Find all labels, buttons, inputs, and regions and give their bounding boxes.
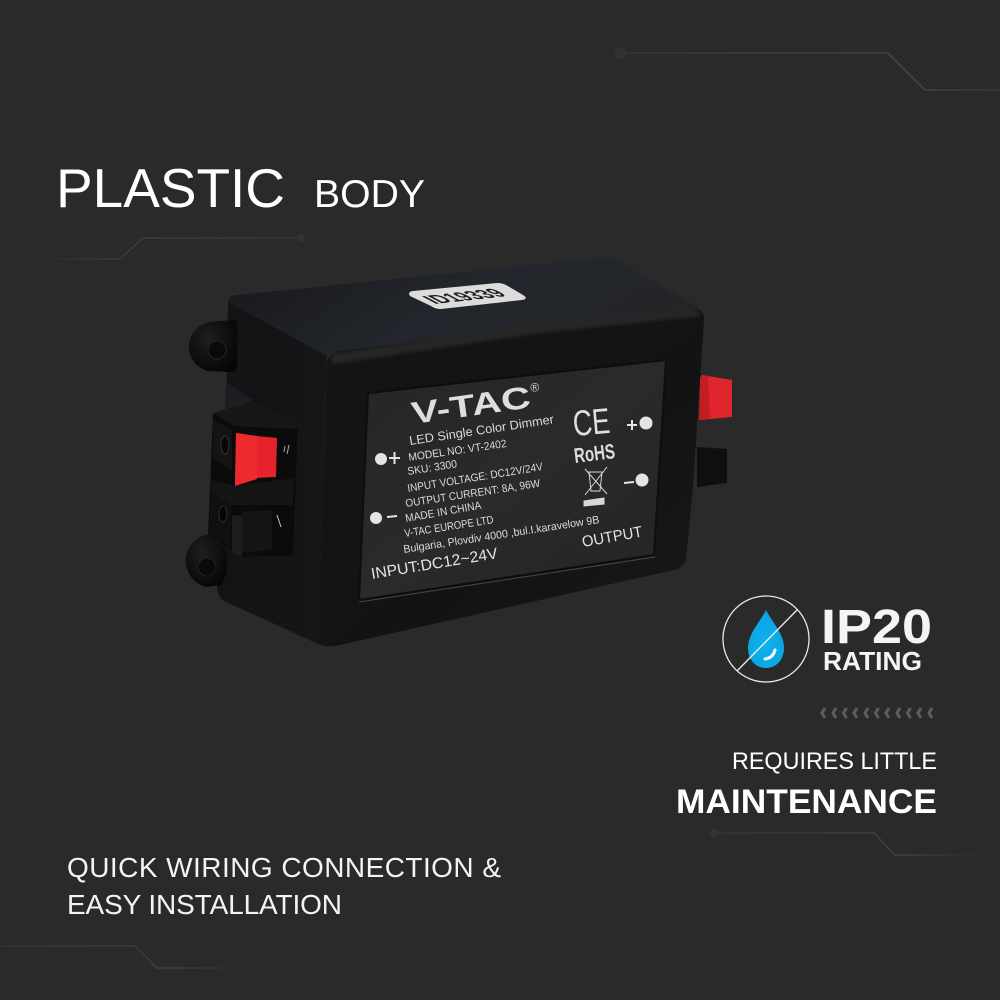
upper side panel: [213, 420, 232, 470]
icon: crossed-out bin: [584, 467, 607, 506]
right connector: [697, 375, 732, 487]
left connector: [208, 402, 298, 557]
text block: requires little maintenance: [676, 748, 937, 821]
lower side hole: [219, 506, 227, 522]
upper side hole: [221, 436, 229, 454]
housing: [217, 257, 704, 646]
product details text: LED Single Color Dimmer: [408, 412, 555, 448]
icon: no water: [723, 596, 809, 682]
product details text: V-TAC EUROPE LTD: [404, 514, 494, 540]
heading: plastic body: [56, 157, 425, 219]
registered mark: ®: [529, 380, 540, 395]
housing: lit edge: [332, 307, 702, 364]
lower lever edge: [232, 515, 242, 557]
heading word: body: BODY: [314, 173, 425, 216]
lower lever: [242, 510, 272, 553]
product details text: MADE IN CHINA: [404, 500, 483, 525]
output label: OUTPUT: [581, 524, 644, 551]
red lever highlight: [235, 433, 257, 486]
rating text: RATING: [823, 646, 922, 676]
text line: easy installation: EASY INSTALLATION: [67, 889, 342, 920]
decorative circuit line: top right: [614, 47, 1000, 90]
housing: side face: [217, 295, 327, 644]
decorative circuit line: bottom left: [0, 946, 248, 968]
rohs mark: RoHS: [573, 440, 616, 468]
connector top face: [213, 402, 298, 429]
text line: maintenance: MAINTENANCE: [676, 783, 937, 821]
ip20 rating badge: [723, 596, 932, 682]
ip20 text: IP20: [821, 601, 932, 654]
input label: INPUT:DC12~24V: [370, 545, 500, 583]
upper tab: [189, 320, 237, 372]
product details text: OUTPUT CURRENT: 8A, 96W: [405, 478, 541, 510]
lower contact glint: [277, 515, 281, 527]
polarity markers: input: [370, 452, 400, 524]
housing: front face: [318, 309, 704, 646]
product photo: dimmer unit: [186, 257, 732, 646]
text block: quick wiring: [67, 852, 501, 920]
lower screw hole: [198, 558, 216, 576]
id sticker: [409, 283, 526, 309]
wall recess behind left connector: [226, 383, 253, 412]
product details text: Bulgaria, Plovdiv 4000 ,bul.I.karavelow 9B: [403, 514, 600, 556]
red lever: [235, 433, 277, 486]
upper screw hole: [208, 341, 226, 359]
chevron row divider: [822, 708, 932, 718]
id sticker: ID19339: [416, 286, 513, 306]
lower tab: [186, 534, 227, 587]
product details text: INPUT VOLTAGE: DC12V/24V: [407, 461, 544, 495]
decorative circuit line: under heading: [30, 234, 305, 259]
product details text: [403, 412, 600, 556]
text line: quick wiring connection: QUICK WIRING CONNECTION &: [67, 852, 501, 883]
mounting screw tabs: [186, 320, 237, 587]
text line: requires little: REQUIRES LITTLE: [732, 748, 937, 775]
decorative circuit line: lower right: [710, 829, 987, 855]
heading word: plastic: PLASTIC: [56, 157, 285, 219]
connector body: [208, 402, 298, 557]
housing: top face: [228, 257, 702, 356]
middle band: [211, 478, 294, 505]
polarity markers: output: [624, 416, 652, 486]
product details text: MODEL NO: VT-2402: [408, 438, 507, 464]
product details text: SKU: 3300: [407, 458, 458, 478]
upper contact glint: [284, 445, 289, 454]
brand logo: V-TAC: [409, 380, 533, 431]
printed label plate: [359, 360, 666, 602]
ce mark: CE: [571, 400, 612, 444]
lower side panel: [209, 492, 231, 547]
